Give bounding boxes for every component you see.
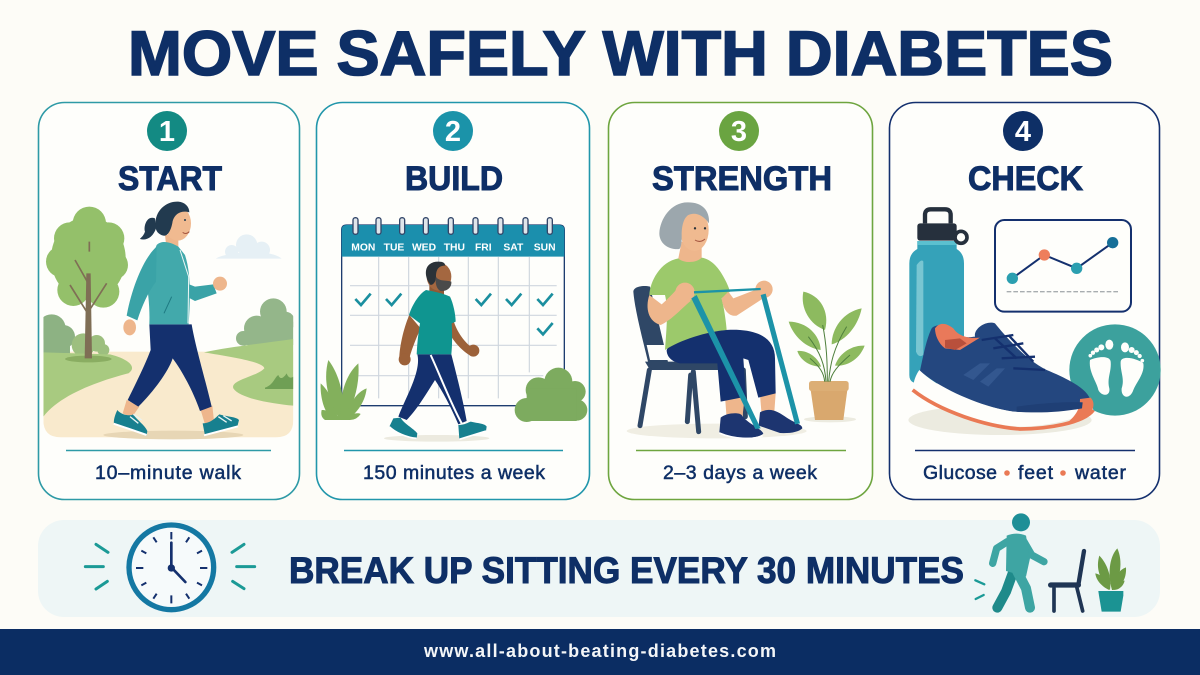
panel: start — [38, 102, 299, 500]
divider — [66, 450, 271, 452]
number badge 4: 4 — [1015, 116, 1031, 148]
icon: clock with rays — [85, 525, 255, 610]
banner message: BREAK UP SITTING EVERY 30 MINUTES — [289, 550, 964, 591]
divider — [636, 450, 846, 452]
number badge 3: 3 — [731, 116, 747, 148]
illustration: woman walking in park — [38, 202, 295, 439]
illustration: man walking past weekly calendar: THU — [444, 243, 465, 254]
heading: build: BUILD — [405, 160, 503, 198]
number badge 2 — [433, 111, 473, 151]
heading: check: CHECK — [968, 160, 1083, 198]
heading: strength: STRENGTH — [652, 160, 832, 198]
banner: break up sitting — [38, 513, 1160, 617]
icon: water bottle — [909, 209, 967, 383]
illustration: man walking past weekly calendar: WED — [412, 243, 437, 254]
icon: running shoe — [908, 323, 1094, 435]
icon: footprints — [1069, 324, 1161, 416]
illustration: man walking past weekly calendar — [321, 218, 587, 442]
panel: strength — [608, 102, 872, 500]
divider — [344, 450, 563, 452]
panel: build — [316, 102, 590, 500]
panel: check — [890, 102, 1161, 500]
number badge 2: 2 — [445, 116, 461, 148]
caption: glucose, feet, water — [923, 462, 1126, 484]
illustration: seated woman with resistance band — [627, 202, 865, 438]
number badge 4 — [1003, 111, 1043, 151]
divider — [915, 450, 1135, 452]
illustration: man walking past weekly calendar: SAT — [503, 243, 524, 254]
caption: glucose, feet, water: feet — [1018, 462, 1054, 484]
footer url: www.all-about-beating-diabetes.com — [423, 641, 776, 661]
caption: 10-minute walk: 10–minute walk — [95, 462, 241, 484]
number badge 1 — [147, 111, 187, 151]
heading: start: START — [118, 160, 222, 198]
caption: 150 minutes a week: 150 minutes a week — [363, 462, 545, 484]
illustration: bottle, glucose chart, shoe and feet — [908, 209, 1161, 435]
footer bar — [0, 629, 1200, 675]
illustration: man walking past weekly calendar: SUN — [534, 243, 556, 254]
caption: glucose, feet, water: Glucose — [923, 462, 997, 484]
illustration: man walking past weekly calendar: FRI — [475, 243, 492, 254]
illustration: man walking past weekly calendar: TUE — [384, 243, 404, 254]
icon: walker, chair and plant — [975, 513, 1126, 612]
glucose chart — [995, 220, 1131, 312]
title: MOVE SAFELY WITH DIABETES — [128, 19, 1113, 89]
number badge 3 — [719, 111, 759, 151]
number badge 1: 1 — [159, 116, 175, 148]
caption: glucose, feet, water: water — [1074, 462, 1126, 484]
illustration: man walking past weekly calendar: MON — [351, 243, 375, 254]
caption: 2-3 days a week: 2–3 days a week — [663, 462, 817, 484]
